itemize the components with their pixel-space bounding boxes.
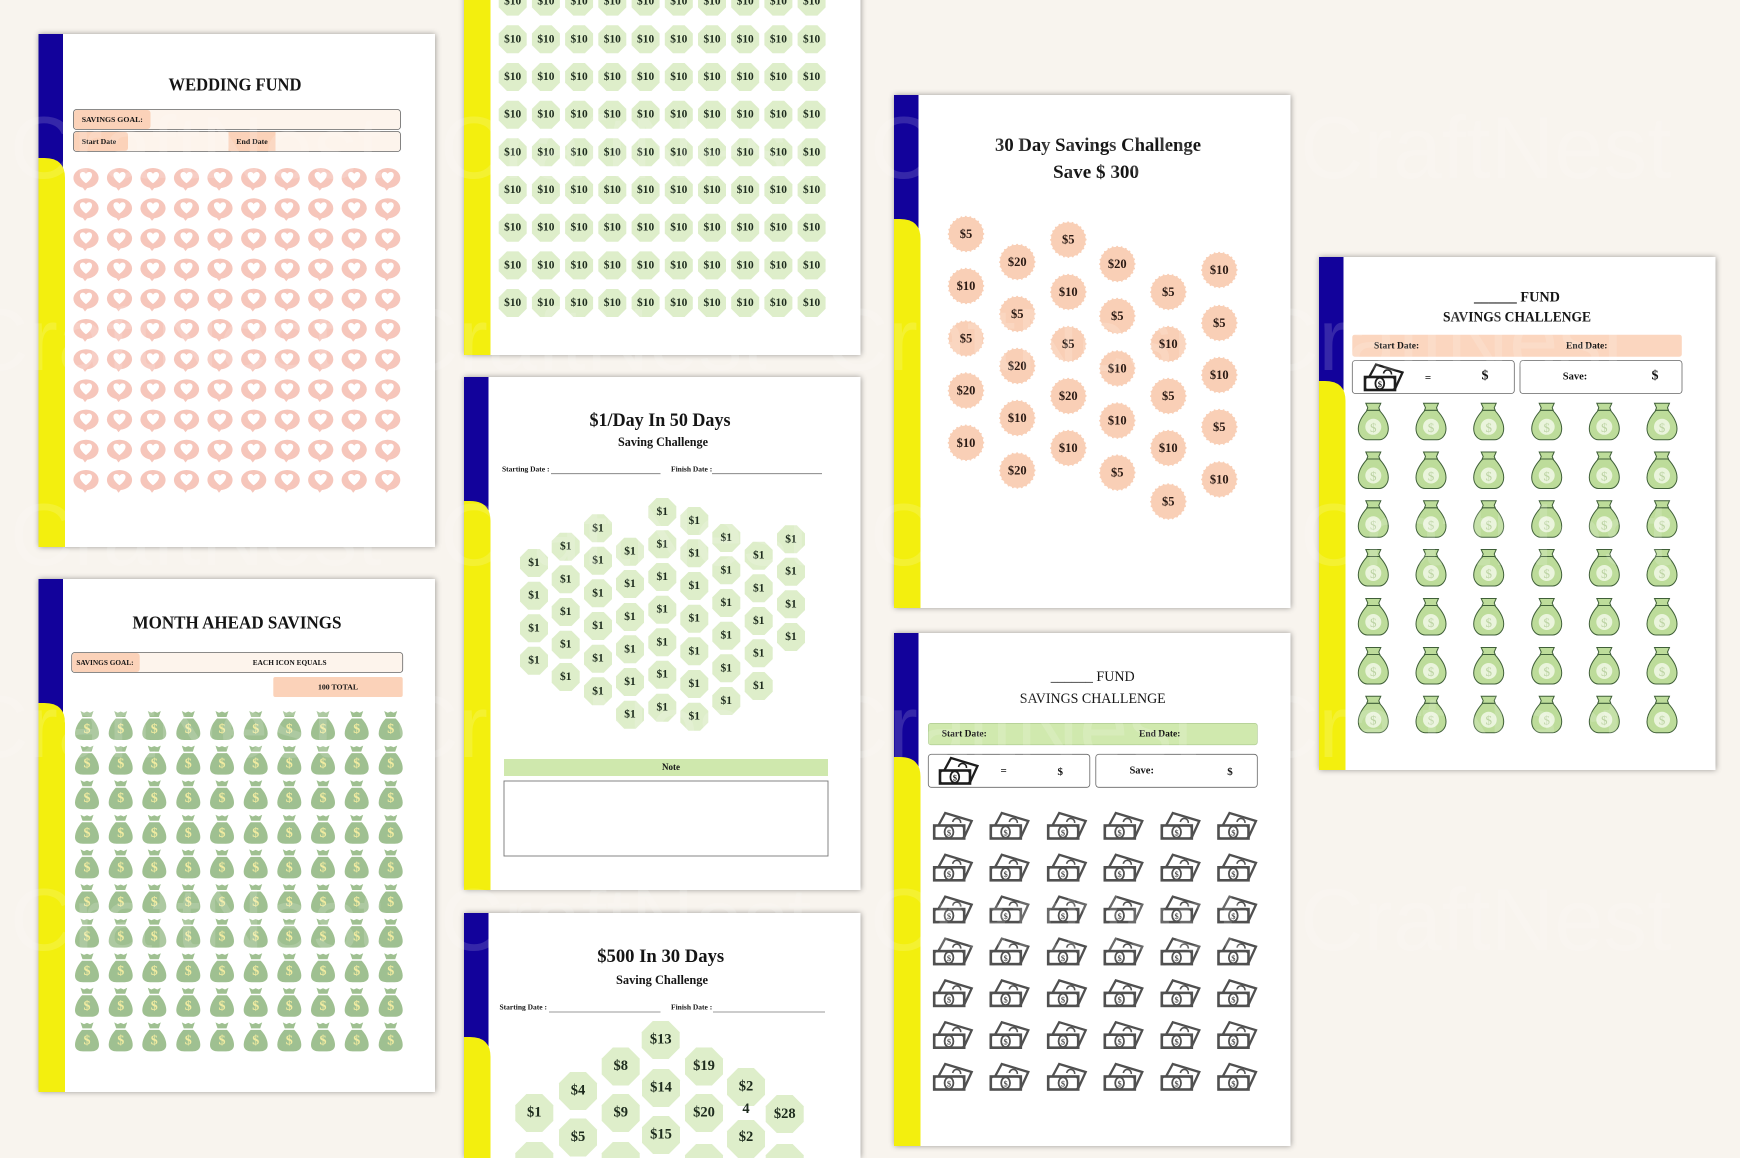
ten dollar octagons: $10 <box>803 33 820 45</box>
scalloped amount circles: $5 <box>960 227 972 241</box>
ten dollar octagons: $10 <box>637 146 654 158</box>
save box <box>1520 360 1682 394</box>
one dollar octagons: $1 <box>624 708 636 721</box>
one dollar octagons: $1 <box>560 605 572 618</box>
ten dollar octagons: $10 <box>571 297 588 309</box>
amount octagons: 4 <box>742 1101 750 1117</box>
panel: one dollar a day in 50 days <box>464 377 860 890</box>
ten dollar octagons: $10 <box>803 146 820 158</box>
total box <box>273 677 403 697</box>
ten dollar octagons: $10 <box>670 109 688 121</box>
scalloped amount circles: $5 <box>960 332 972 346</box>
title: wedding fund: WEDDING FUND <box>168 74 302 94</box>
watermark: CraftNest <box>395 290 767 389</box>
one dollar octagons: $1 <box>624 545 636 558</box>
ten dollar octagons: $10 <box>637 297 654 309</box>
ten dollar octagons: $10 <box>737 184 754 196</box>
title: 30 day savings challenge: 30 Day Savings Challenge <box>995 135 1201 156</box>
watermark: CraftNest <box>870 98 1242 197</box>
money bag icon grid <box>75 711 403 1051</box>
scalloped amount circles: $10 <box>1210 368 1229 382</box>
ten dollar octagons: $10 <box>637 259 654 271</box>
date bar: Start Date: <box>942 730 987 740</box>
ten dollar octagons: $10 <box>604 109 621 121</box>
one dollar octagons: $1 <box>721 661 732 674</box>
ten dollar octagons: $10 <box>537 71 555 83</box>
scalloped amount circles: $10 <box>1108 361 1127 375</box>
watermark: CraftNest <box>870 485 1242 584</box>
date bar: Start Date: <box>1374 342 1419 352</box>
ten dollar octagons: $10 <box>571 71 588 83</box>
scalloped amount circles: $5 <box>1213 316 1226 330</box>
ten dollar octagons: $10 <box>737 222 754 234</box>
one dollar octagons: $1 <box>657 668 668 681</box>
ten dollar octagons: $10 <box>537 184 555 196</box>
savings goal bar <box>72 652 403 672</box>
ten dollar octagons: $10 <box>537 109 555 121</box>
ten dollar octagons: $10 <box>770 71 787 83</box>
one dollar octagons: $1 <box>689 546 700 559</box>
ten dollar octagons: $10 <box>803 71 820 83</box>
one dollar octagons: $1 <box>560 670 572 683</box>
one dollar octagons: $1 <box>624 642 636 655</box>
one dollar octagons: $1 <box>753 581 765 594</box>
watermark: CraftNest <box>1255 290 1627 389</box>
one dollar octagons: $1 <box>528 654 540 667</box>
ten dollar octagons: $10 <box>637 222 654 234</box>
title: savings challenge: SAVINGS CHALLENGE <box>1020 691 1166 707</box>
ten dollar octagons: $10 <box>604 146 621 158</box>
ten dollar octagons: $10 <box>737 33 754 45</box>
scalloped amount circles: $10 <box>957 436 975 450</box>
scalloped amount circles: $20 <box>1008 359 1027 373</box>
one dollar octagons: $1 <box>657 635 668 648</box>
date bar: End Date: <box>1139 730 1180 740</box>
scalloped amount circles: $10 <box>1159 441 1178 455</box>
ten dollar octagons: $10 <box>537 297 555 309</box>
title: fund: ______ FUND <box>1473 290 1560 306</box>
ten dollar octagons: $10 <box>571 184 588 196</box>
save box <box>1096 754 1257 787</box>
watermark: CraftNest <box>10 98 382 197</box>
one dollar octagons: $1 <box>528 556 540 569</box>
ten dollar octagons: $10 <box>670 33 688 45</box>
ten dollar octagons: $10 <box>604 222 621 234</box>
save box: Save: <box>1129 766 1154 776</box>
scalloped amount circles: $20 <box>1008 464 1027 478</box>
scalloped amount circles: $10 <box>1210 472 1229 486</box>
one dollar octagons: $1 <box>528 621 540 634</box>
icon: cash <box>1364 364 1402 391</box>
one dollar octagons: $1 <box>689 644 700 657</box>
subtitle: Saving Challenge <box>616 973 708 987</box>
save box: Save: <box>1563 372 1587 382</box>
ten dollar octagons: $10 <box>571 33 588 45</box>
note heading bar <box>504 759 828 776</box>
one dollar octagons: $1 <box>657 505 668 518</box>
date lines: Finish Date : <box>671 1002 712 1012</box>
ten dollar octagons: $10 <box>770 184 787 196</box>
date lines <box>502 464 822 474</box>
ten dollar octagons: $10 <box>803 184 820 196</box>
watermark: CraftNest <box>10 870 382 969</box>
scalloped amount circles: $5 <box>1062 233 1075 247</box>
ten dollar octagons: $10 <box>504 259 522 271</box>
date bar <box>928 723 1257 745</box>
scalloped amount circles: $5 <box>1111 309 1124 323</box>
watermark: CraftNest <box>10 485 382 584</box>
panel: fund savings challenge (bags) <box>1319 257 1716 770</box>
ten dollar octagons: $10 <box>737 109 754 121</box>
ten dollar octagons: $10 <box>504 109 522 121</box>
amount octagons: $9 <box>613 1104 628 1120</box>
scalloped amount circles: $10 <box>1059 441 1078 455</box>
ten dollar octagons: $10 <box>637 33 654 45</box>
note box <box>504 781 828 856</box>
scalloped amount circles: $10 <box>1210 263 1229 277</box>
one dollar octagons: $1 <box>689 677 700 690</box>
ten dollar octagons: $10 <box>537 33 555 45</box>
watermark <box>0 98 1672 969</box>
one dollar octagons: $1 <box>785 532 797 545</box>
one dollar octagons: $1 <box>624 577 636 590</box>
icon: cash <box>939 758 978 784</box>
icon value box: $ <box>1482 368 1488 384</box>
scalloped amount circles: $5 <box>1062 337 1075 351</box>
scalloped amount circles: $5 <box>1011 307 1024 321</box>
subtitle: save $300: Save $ 300 <box>1053 162 1139 183</box>
amount octagons: $15 <box>650 1126 672 1142</box>
ten dollar octagons: $10 <box>703 184 721 196</box>
ten dollar octagons: $10 <box>604 33 621 45</box>
date lines: Starting Date : <box>500 1002 547 1012</box>
one dollar octagons: $1 <box>528 589 540 602</box>
watermark: CraftNest <box>1255 677 1627 776</box>
ten dollar octagons: $10 <box>604 71 621 83</box>
one dollar octagons: $1 <box>592 521 604 534</box>
icon value box: = <box>1425 372 1431 384</box>
watermark: CraftNest <box>1300 870 1672 969</box>
scalloped amount circles: $10 <box>1059 285 1078 299</box>
ten dollar octagons: $10 <box>803 297 820 309</box>
save box: $ <box>1652 368 1658 384</box>
amount octagons: $4 <box>571 1082 585 1098</box>
one dollar octagons: $1 <box>592 586 604 599</box>
save box: $ <box>1227 766 1233 778</box>
date bar: Start Date <box>82 137 117 146</box>
total box: 100 TOTAL <box>318 682 358 692</box>
ten dollar octagons: $10 <box>504 33 522 45</box>
ten dollar octagons: $10 <box>770 222 787 234</box>
amount octagons: $14 <box>650 1080 672 1096</box>
ten dollar octagons: $10 <box>637 184 654 196</box>
scalloped amount circles: $5 <box>1111 466 1124 480</box>
savings goal bar: SAVINGS GOAL: <box>82 115 143 124</box>
ten dollar octagons: $10 <box>504 146 522 158</box>
ten dollar octagons: $10 <box>670 222 688 234</box>
watermark: CraftNest <box>870 870 1242 969</box>
one dollar octagons: $1 <box>785 630 797 643</box>
date bar <box>1352 335 1682 357</box>
one dollar octagons: $1 <box>560 572 572 585</box>
cash icon grid <box>933 813 1256 1090</box>
scalloped amount circles: $20 <box>1059 389 1078 403</box>
title: $1/Day In 50 Days: $1/Day In 50 Days <box>590 410 730 431</box>
panel: 30 day savings challenge <box>894 95 1290 608</box>
amount octagons: $28 <box>774 1106 796 1122</box>
ten dollar octagons: $10 <box>571 222 588 234</box>
one dollar octagons: $1 <box>592 619 604 632</box>
one dollar octagons: $1 <box>753 614 765 627</box>
watermark: CraftNest <box>395 677 767 776</box>
one dollar octagons: $1 <box>624 610 636 623</box>
panel: $500 in 30 days <box>464 913 860 1158</box>
one dollar octagons: $1 <box>785 597 797 610</box>
ten dollar octagons: $10 <box>604 297 621 309</box>
ten dollar octagons: $10 <box>670 184 688 196</box>
one dollar octagons: $1 <box>753 679 765 692</box>
amount octagons: $20 <box>693 1104 715 1120</box>
watermark: CraftNest <box>440 870 812 969</box>
amount octagons: $19 <box>693 1058 715 1074</box>
ten dollar octagons: $10 <box>571 109 588 121</box>
ten dollar octagons: $10 <box>670 71 688 83</box>
panel: wedding fund <box>38 34 435 547</box>
one dollar octagons: $1 <box>721 629 732 642</box>
scalloped amount circles: $5 <box>1162 389 1175 403</box>
watermark: CraftNest <box>825 290 1197 389</box>
ten dollar octagons: $10 <box>737 146 754 158</box>
ten dollar octagons: $10 <box>770 33 787 45</box>
ten dollar octagons: $10 <box>604 259 621 271</box>
amount octagons: $5 <box>571 1129 585 1145</box>
title: fund: ______ FUND <box>1050 669 1135 685</box>
watermark: CraftNest <box>1300 485 1672 584</box>
one dollar octagons: $1 <box>721 563 732 576</box>
one dollar octagons: $1 <box>657 701 668 714</box>
ten dollar octagons: $10 <box>703 109 721 121</box>
one dollar octagons: $1 <box>657 570 668 583</box>
ten dollar octagons: $10 <box>537 146 555 158</box>
note heading bar: Note <box>662 762 680 772</box>
ten dollar octagons: $10 <box>703 33 721 45</box>
title: month ahead savings: MONTH AHEAD SAVINGS <box>132 612 342 632</box>
ten dollar octagons: $10 <box>737 71 754 83</box>
scalloped amount circles: $5 <box>1213 420 1226 434</box>
scalloped amount circles: $20 <box>1008 255 1027 269</box>
ten dollar octagons: $10 <box>504 222 522 234</box>
one dollar octagons: $1 <box>721 531 732 544</box>
one dollar octagons: $1 <box>785 565 797 578</box>
amount octagons <box>515 1021 804 1158</box>
watermark: CraftNest <box>1300 98 1672 197</box>
ten dollar octagons: $10 <box>770 146 787 158</box>
watermark: CraftNest <box>440 98 812 197</box>
green money bag grid <box>1358 403 1677 733</box>
heart icon grid <box>73 168 400 493</box>
one dollar octagons: $1 <box>624 675 636 688</box>
subtitle: Saving Challenge <box>618 435 708 449</box>
ten dollar octagons <box>499 0 826 317</box>
title: $500 In 30 Days: $500 In 30 Days <box>597 946 724 967</box>
ten dollar octagons: $10 <box>703 71 721 83</box>
ten dollar octagons: $10 <box>737 259 754 271</box>
ten dollar octagons: $10 <box>504 297 522 309</box>
ten dollar octagons: $10 <box>504 184 522 196</box>
one dollar octagons: $1 <box>657 537 668 550</box>
amount octagons: $13 <box>650 1032 672 1048</box>
ten dollar octagons: $10 <box>571 146 588 158</box>
ten dollar octagons: $10 <box>703 222 721 234</box>
ten dollar octagons: $10 <box>637 71 654 83</box>
ten dollar octagons: $10 <box>670 146 688 158</box>
scalloped amount circles: $10 <box>1108 414 1127 428</box>
one dollar octagons: $1 <box>753 549 765 562</box>
one dollar octagons: $1 <box>721 596 732 609</box>
one dollar octagons: $1 <box>721 694 732 707</box>
icon value box <box>928 754 1090 787</box>
amount octagons: $2 <box>739 1078 753 1094</box>
date lines <box>500 1002 825 1012</box>
ten dollar octagons: $10 <box>670 259 688 271</box>
scalloped amount circles: $5 <box>1162 495 1175 509</box>
amount octagons: $2 <box>739 1129 753 1145</box>
scalloped amount circles: $20 <box>957 384 975 398</box>
ten dollar octagons: $10 <box>703 297 721 309</box>
ten dollar octagons: $10 <box>571 259 588 271</box>
one dollar octagons: $1 <box>657 603 668 616</box>
date bar <box>74 132 400 152</box>
watermark: CraftNest <box>825 677 1197 776</box>
date lines: Starting Date : <box>502 464 550 474</box>
ten dollar octagons: $10 <box>604 184 621 196</box>
one dollar octagons: $1 <box>689 514 700 527</box>
date lines: Finish Date : <box>671 464 712 474</box>
ten dollar octagons: $10 <box>670 297 688 309</box>
scalloped amount circles: $10 <box>957 279 975 293</box>
ten dollar octagons: $10 <box>770 297 787 309</box>
panel: fund savings challenge (cash) <box>894 633 1290 1146</box>
panel: month ahead savings <box>38 579 435 1092</box>
ten dollar octagons: $10 <box>770 109 787 121</box>
title: savings challenge: SAVINGS CHALLENGE <box>1443 310 1591 326</box>
savings goal bar <box>74 110 400 130</box>
one dollar octagons: $1 <box>753 646 765 659</box>
ten dollar octagons: $10 <box>803 222 820 234</box>
one dollar octagons: $1 <box>592 652 604 665</box>
one dollar octagons <box>520 498 805 731</box>
scalloped amount circles <box>949 217 1237 519</box>
panel: ten dollar grid <box>464 0 860 355</box>
one dollar octagons: $1 <box>560 638 572 651</box>
scalloped amount circles: $5 <box>1162 285 1175 299</box>
one dollar octagons: $1 <box>689 710 700 723</box>
one dollar octagons: $1 <box>592 684 604 697</box>
icon value box: $ <box>1058 766 1064 778</box>
one dollar octagons: $1 <box>689 612 700 625</box>
ten dollar octagons: $10 <box>504 71 522 83</box>
ten dollar octagons: $10 <box>803 109 820 121</box>
icon value box: = <box>1001 765 1007 777</box>
date bar: End Date <box>236 137 268 146</box>
one dollar octagons: $1 <box>592 554 604 567</box>
ten dollar octagons: $10 <box>703 259 721 271</box>
ten dollar octagons: $10 <box>770 259 787 271</box>
icon value box <box>1352 360 1514 394</box>
scalloped amount circles: $10 <box>1159 337 1178 351</box>
one dollar octagons: $1 <box>560 540 572 553</box>
scalloped amount circles: $20 <box>1108 257 1127 271</box>
amount octagons: $8 <box>613 1058 628 1074</box>
scalloped amount circles: $10 <box>1008 411 1027 425</box>
ten dollar octagons: $10 <box>803 259 820 271</box>
ten dollar octagons: $10 <box>537 222 555 234</box>
one dollar octagons: $1 <box>689 579 700 592</box>
ten dollar octagons: $10 <box>703 146 721 158</box>
savings goal bar: SAVINGS GOAL: <box>76 658 134 667</box>
watermark: CraftNest <box>440 485 812 584</box>
ten dollar octagons: $10 <box>737 297 754 309</box>
savings goal bar: EACH ICON EQUALS <box>253 658 327 667</box>
amount octagons: $1 <box>527 1104 542 1120</box>
ten dollar octagons: $10 <box>537 259 555 271</box>
date bar: End Date: <box>1566 342 1607 352</box>
ten dollar octagons: $10 <box>637 109 654 121</box>
